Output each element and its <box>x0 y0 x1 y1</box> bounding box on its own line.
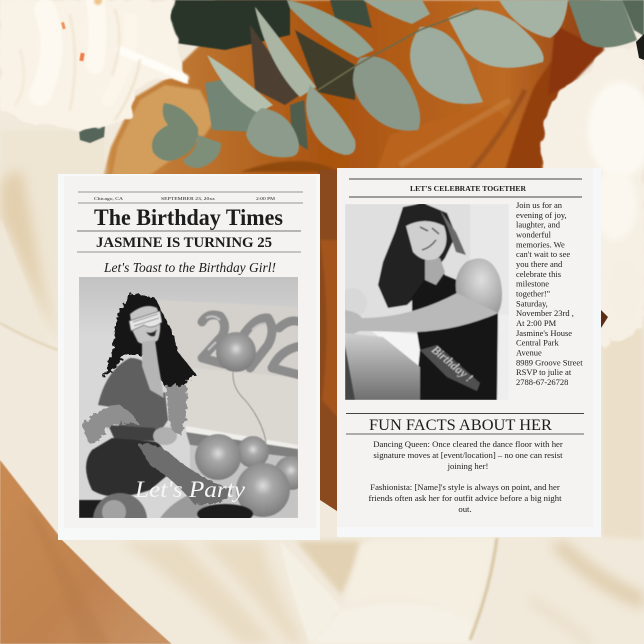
terracotta cloth <box>0 460 172 644</box>
photo: woman with balloons <box>79 277 298 518</box>
headline: JASMINE IS TURNING 25 <box>96 235 272 251</box>
invitation text column: Jasmine's House <box>516 328 572 338</box>
invitation text column: RSVP to julie at <box>516 367 572 377</box>
invitation text column: November 23rd , <box>516 308 574 318</box>
dark floor corner <box>79 500 103 518</box>
hand and glass <box>170 422 172 428</box>
leaf lower long <box>306 85 356 155</box>
fun fact: dancing queen <box>373 439 563 471</box>
neck <box>425 258 445 285</box>
dress above arm <box>411 273 458 312</box>
fun fact: fashionista: Fashionista: [Name]'s style is always on point, and her <box>370 482 560 492</box>
tinsel <box>82 385 232 505</box>
disco ball <box>92 492 148 518</box>
invitation text column: celebrate this <box>516 269 561 279</box>
invitation text column: Central Park <box>516 338 559 348</box>
woman: dress top <box>98 358 168 432</box>
fun fact: dancing queen: joining her! <box>447 461 488 471</box>
dateline row: Chicago, CA <box>94 196 124 202</box>
invitation text column: memories. We <box>516 239 565 249</box>
fun fact: fashionista: friends often ask her for outfit advice before a big night <box>368 493 562 503</box>
card background <box>337 168 601 537</box>
invitation text column: wonderful <box>516 230 552 240</box>
woman: hair <box>103 293 195 387</box>
invitation text column: Saturday, <box>516 298 548 308</box>
fun fact: dancing queen: Dancing Queen: Once cleared the dance floor with her <box>373 439 563 449</box>
invitation text column: laughter, and <box>516 220 561 230</box>
balloon above sofa <box>216 332 256 372</box>
script subheading: Let's Toast to the Birthday Girl! <box>103 261 276 276</box>
balloon behind arm <box>345 290 346 316</box>
wood strip between the cards <box>318 170 340 513</box>
leg <box>160 496 208 518</box>
dateline row <box>78 192 303 203</box>
invitation text column: Join us for an <box>516 200 563 210</box>
face <box>406 221 446 260</box>
wood tabletop <box>103 0 604 180</box>
fun fact: fashionista <box>368 482 562 514</box>
photo caption: Let's Party: Let's Party <box>134 477 246 502</box>
sofa <box>158 300 298 378</box>
section heading: fun facts: FUN FACTS ABOUT HER <box>369 417 553 434</box>
small heart leaves <box>152 103 198 161</box>
leaf big right <box>410 27 483 104</box>
invitation text column: 8989 Groove Street <box>516 357 583 367</box>
invitation text column: together!" <box>516 288 550 298</box>
floor balloons <box>237 436 269 468</box>
leaf top middle <box>363 0 430 24</box>
leaf pale tip <box>207 55 273 113</box>
card background <box>58 174 320 540</box>
woman: skirt <box>86 438 176 496</box>
fun fact: dancing queen: signature moves at [event/location] – no one can resist <box>373 450 563 460</box>
white flower top left <box>0 0 189 130</box>
invitation text column: At 2:00 PM <box>516 318 557 328</box>
sash lettering: Birthday ! <box>429 343 476 385</box>
photo: seated woman with sash <box>337 203 509 400</box>
invitation text column <box>516 200 583 387</box>
cream fabric lower folds <box>62 540 320 644</box>
panel: back details card <box>337 168 601 537</box>
invitation text column: evening of joy, <box>516 210 567 220</box>
leg <box>345 333 420 400</box>
sash <box>420 345 480 391</box>
dark back foliage <box>168 0 290 50</box>
fun fact: fashionista: out. <box>458 504 472 514</box>
dateline row: 2:00 PM <box>256 196 275 201</box>
dateline row: SEPTEMBER 23, 20xx <box>161 196 216 202</box>
leaf upper right <box>448 10 544 68</box>
forearm <box>345 293 498 338</box>
woman: face and neck <box>130 306 160 345</box>
hair <box>378 203 456 308</box>
leaf top sage <box>287 0 374 58</box>
shoulder and upper arm <box>456 258 502 319</box>
section heading: let's celebrate together: LET'S CELEBRATE TOGETHER <box>410 184 526 193</box>
invitation text column: Avenue <box>516 347 542 357</box>
balloon string <box>233 372 266 442</box>
stem <box>318 8 478 90</box>
leaf big centre <box>353 57 420 131</box>
invitation text column: milestone <box>516 279 549 289</box>
invitation text column: can't wait to see <box>516 249 570 259</box>
eucalyptus leaves <box>79 0 644 168</box>
dress below arm <box>415 312 498 400</box>
woman: sleeve forearm <box>108 425 155 441</box>
smile <box>146 329 157 336</box>
invitation text column: 2788-67-26728 <box>516 377 568 387</box>
cream fabric upper left folds <box>0 130 105 348</box>
white flower right <box>542 34 644 345</box>
leaf thin upper <box>255 7 316 97</box>
panel: front newspaper card <box>58 174 320 547</box>
leaf round lower <box>246 108 299 157</box>
masthead title: The Birthday Times <box>94 205 283 230</box>
invitation text column: you there and <box>516 259 563 269</box>
party glasses <box>129 311 162 331</box>
foil number balloons <box>202 315 300 375</box>
